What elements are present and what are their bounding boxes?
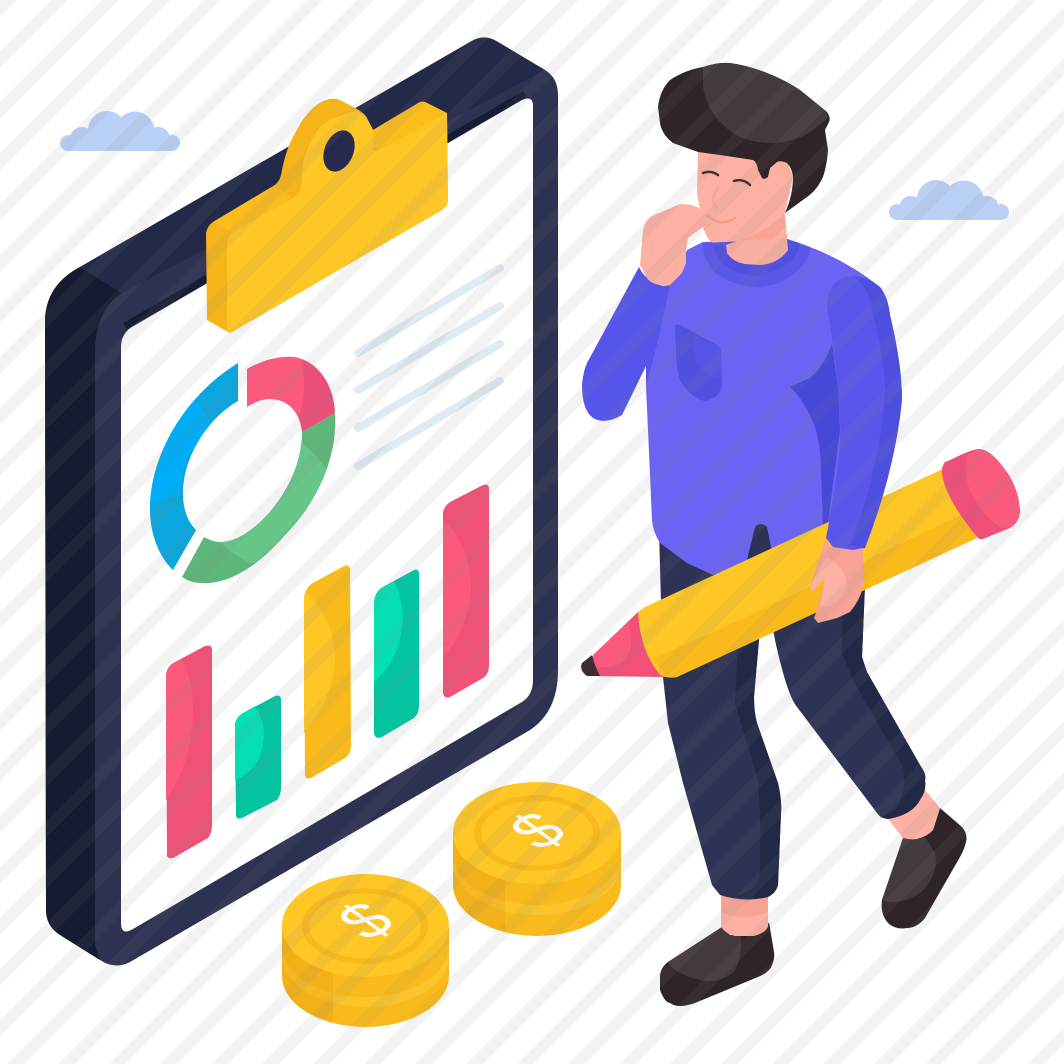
clipboard dark side edge [45,267,122,960]
clip hole [318,126,360,176]
pencil body [638,468,977,678]
clip [206,99,448,333]
pencil graphite [581,655,600,676]
coin stack left [282,874,449,1027]
neck shadow [726,214,786,251]
front shoe [660,922,774,1006]
crotch notch [745,524,772,580]
eye [734,180,750,185]
front ankle [721,890,768,936]
bar 2 [235,696,281,819]
hand on pencil [810,540,863,623]
donut chart [145,350,335,583]
pencil tip [581,612,667,677]
hair [658,63,830,213]
coins [282,782,621,1027]
donut pink segment [247,356,335,432]
torso [646,239,890,575]
right arm sleeve [826,276,902,550]
bar 4 [374,570,419,738]
clip front [227,110,448,332]
eye [703,172,718,175]
bar 3 [304,566,351,778]
clip side [206,99,448,333]
clipboard top edge [80,38,545,293]
icon: left cloud [60,111,180,151]
clipboard [45,38,558,966]
text lines [358,268,500,466]
smile [707,215,735,222]
bar 1 [166,646,212,858]
back leg [765,585,925,819]
face [697,150,793,265]
donut blue segment [145,363,238,570]
head and neck [697,150,793,265]
coin stack right [453,782,621,936]
pencil shade [653,515,977,678]
back shoe [882,808,966,928]
back ankle [888,790,940,839]
pocket [675,324,722,401]
pencil eraser [942,449,1020,539]
dollar sign: $ [494,801,581,860]
hand at chin [640,204,707,286]
torso shadow [790,343,840,538]
left arm sleeve [582,267,670,421]
clipboard paper [121,98,533,931]
icon: right cloud [889,180,1009,220]
clipboard paper shadow [125,94,525,326]
clipboard frame [45,38,558,966]
dollar sign: $ [322,891,409,950]
clip top face [213,102,447,233]
pencil [581,449,1020,678]
collar [703,239,810,287]
donut green segment [182,413,335,583]
bar 5 [443,484,489,698]
person [581,63,1020,1006]
bar chart [166,484,489,858]
front leg [659,530,781,900]
nose [713,188,718,208]
